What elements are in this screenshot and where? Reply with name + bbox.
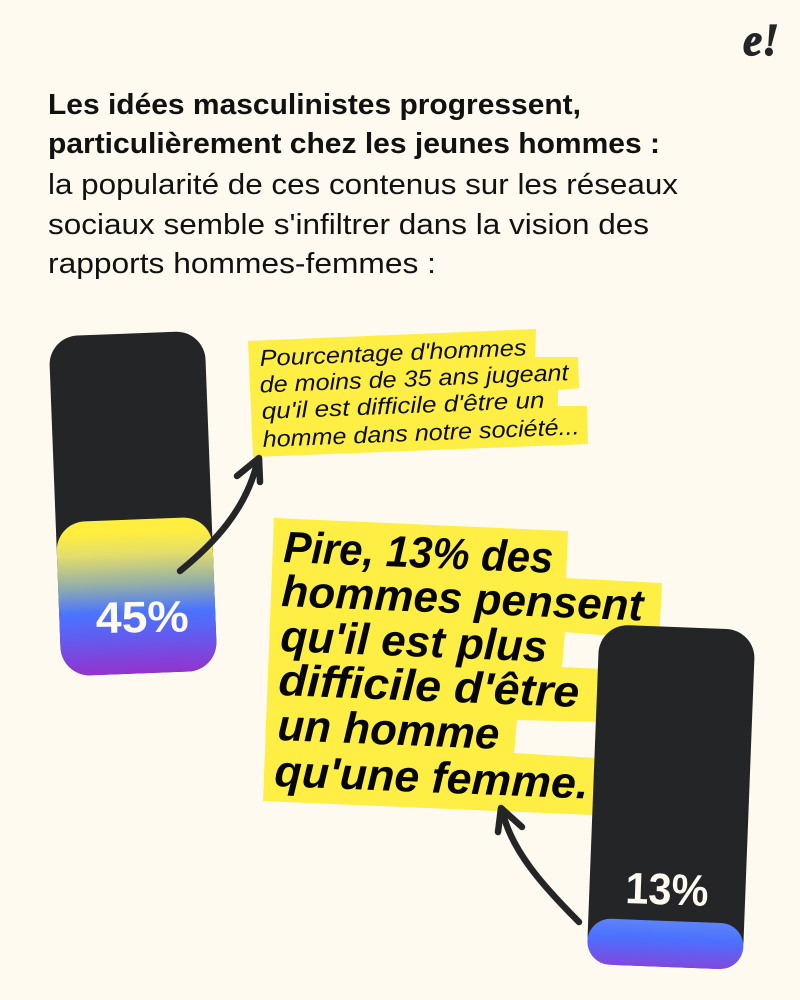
value: 45%: 45% [95,592,189,643]
callout: big statement: hommes pensent [281,567,647,631]
intro text: Les idées masculinistes progressent, [48,89,581,121]
callout: big statement [263,518,662,815]
intro text: rapports hommes-femmes : [48,248,436,280]
bar: 45% [49,331,217,676]
callout: small caption: de moins de 35 ans jugeant [259,359,571,397]
callout: big statement: Pire, 13% des [283,523,554,583]
callout: small caption: qu'il est difficile d'être un [261,387,545,424]
callout: big statement: difficile d'être [278,656,580,717]
value: 13%: 13% [625,864,709,916]
arrow: 13% bar to statement [498,808,579,922]
callout: big statement: qu'il est plus [280,612,548,672]
callout: small caption [248,329,588,457]
intro text: sociaux semble s'infiltrer dans la vision des [48,209,649,241]
callout: small caption: Pourcentage d'hommes [259,334,528,371]
logo: e! [743,14,779,65]
bar: 13% [587,624,755,970]
intro text: particulièrement chez les jeunes hommes : [48,128,660,160]
intro text [48,89,679,280]
arrow: 45% bar to caption [180,458,260,571]
callout: small caption: homme dans notre société... [262,413,580,452]
callout: big statement: qu'une femme. [274,747,589,809]
intro text: la popularité de ces contenus sur les réseaux [48,169,679,201]
callout: big statement: un homme [277,701,500,759]
